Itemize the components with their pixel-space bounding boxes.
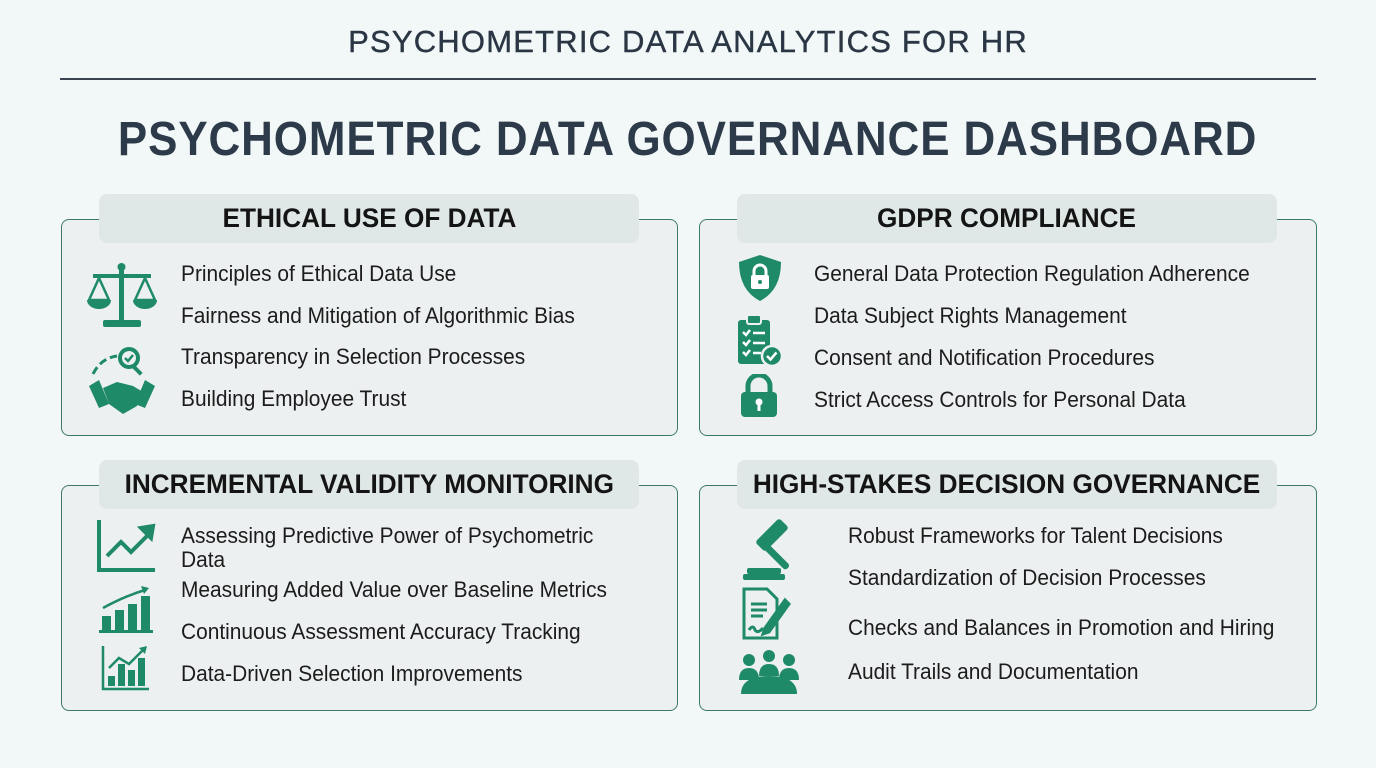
top title: PSYCHOMETRIC DATA ANALYTICS FOR HR	[348, 24, 1028, 59]
panel: ethical use of data: Building Employee Trust	[181, 386, 406, 411]
heading: GDPR: GDPR COMPLIANCE	[877, 203, 1136, 233]
panel: incremental validity monitoring: Data-Driven Selection Improvements	[181, 661, 523, 686]
heading: ethical use	[99, 194, 639, 243]
panel: ethical use of data: Fairness and Mitigation of Algorithmic Bias	[181, 303, 575, 328]
panel: high-stakes decision governance: Checks and Balances in Promotion and Hiring	[848, 615, 1274, 640]
icon: growth chart	[102, 646, 149, 690]
icon: clipboard check	[738, 316, 781, 365]
panel: incremental validity monitoring: Data	[181, 547, 225, 572]
list: Robust Frameworks for Talent Decisions	[848, 523, 1223, 548]
panel: high-stakes decision governance: Audit Trails and Documentation	[848, 659, 1138, 684]
panel: incremental validity monitoring	[61, 460, 678, 711]
icon: meeting people	[739, 650, 799, 694]
panel: ethical use of data: Transparency in Selection Processes	[181, 344, 525, 369]
icon: scales	[87, 263, 157, 327]
heading: incremental validity	[99, 460, 639, 509]
panel: GDPR compliance: Consent and Notification Procedures	[814, 345, 1154, 370]
icon: padlock	[741, 374, 777, 417]
heading: high-stakes: HIGH-STAKES DECISION GOVERNANCE	[753, 469, 1261, 499]
panel: high-stakes decision governance	[699, 460, 1317, 711]
panel: incremental validity monitoring: Measuring Added Value over Baseline Metrics	[181, 577, 607, 602]
panel: incremental validity monitoring: Continuous Assessment Accuracy Tracking	[181, 619, 581, 644]
icon: signed document	[742, 588, 791, 640]
heading: GDPR	[737, 194, 1277, 243]
panel: GDPR compliance	[699, 194, 1317, 436]
heading: ethical use: ETHICAL USE OF DATA	[222, 203, 516, 233]
panel: GDPR compliance: Strict Access Controls for Personal Data	[814, 387, 1186, 412]
icon: handshake	[89, 347, 155, 414]
panel: GDPR compliance: Data Subject Rights Management	[814, 303, 1127, 328]
heading: incremental validity: INCREMENTAL VALIDITY MONITORING	[124, 469, 614, 499]
icon: bar chart	[99, 586, 153, 633]
list: General Data Protection Regulation Adherence	[814, 261, 1250, 286]
icon: gavel	[743, 519, 789, 580]
list: Principles of Ethical Data Use	[181, 261, 456, 286]
main title: PSYCHOMETRIC DATA GOVERNANCE DASHBOARD	[118, 113, 1258, 166]
icon: line chart	[97, 520, 156, 572]
panel: high-stakes decision governance: Standardization of Decision Processes	[848, 565, 1206, 590]
panel: ethical use of data	[61, 194, 678, 436]
icon: shield lock	[739, 255, 781, 301]
list: Assessing Predictive Power of Psychometric	[181, 523, 593, 548]
heading: high-stakes	[737, 460, 1277, 509]
